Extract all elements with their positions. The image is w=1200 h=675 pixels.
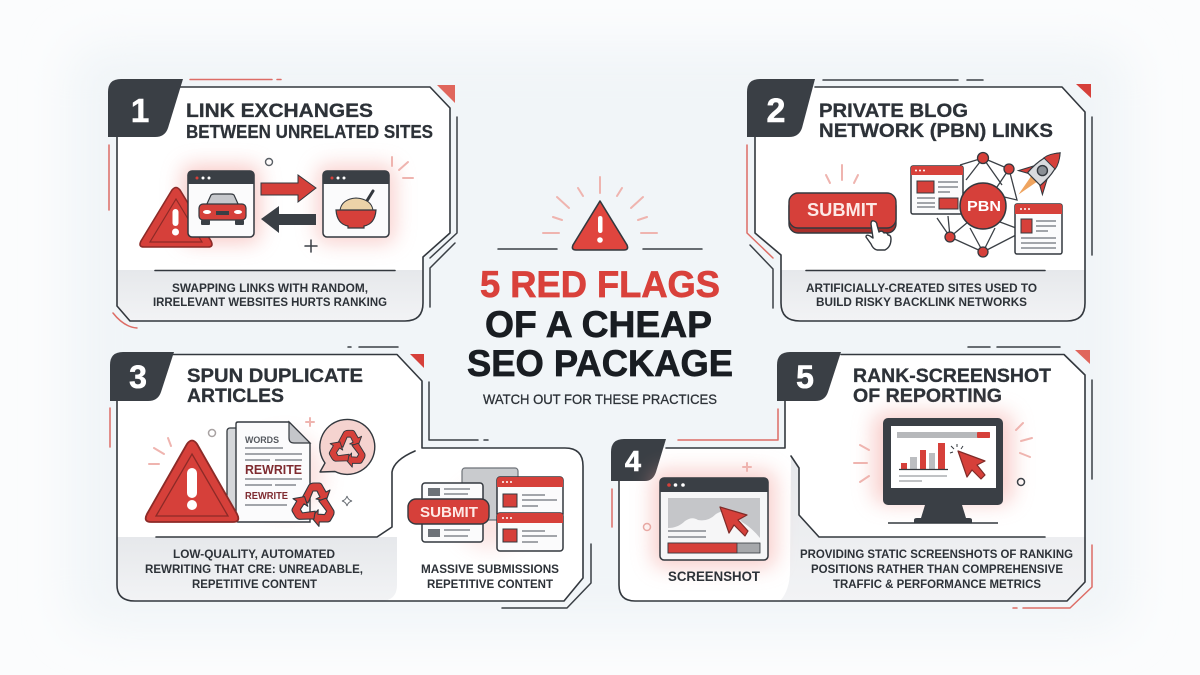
window: left site [911,166,963,214]
arrow: dark left [261,206,316,233]
panel 3 heading [187,366,363,407]
panel 4 number badge: 4 [625,446,641,478]
panel 4 number badge [611,439,666,481]
panel 2 number badge [747,79,815,137]
icon: recycle speech bubble [320,419,375,474]
icon: browser with car [188,171,254,237]
panel 2 description: ARTIFICIALLY-CREATED SITES USED TO [806,282,1037,295]
panel 2 description: BUILD RISKY BACKLINK NETWORKS [816,296,1027,309]
window: right site [1015,204,1062,254]
panel 2 illustration: submit button: SUBMIT [807,200,877,220]
icon: browser with bowl [323,171,389,237]
background [70,45,1130,630]
icon: hand pointer [866,221,891,250]
panel 4 and 5: screenshot and reporting [611,347,1092,608]
panel 5 number badge: 5 [796,359,814,395]
submit button: SUBMIT [420,504,478,521]
panel 3 number badge [110,352,174,401]
panel 3 description: LOW-QUALITY, AUTOMATED [173,548,335,561]
panel 3 description: REPETITIVE CONTENT [192,578,317,591]
panel 2 illustration: submit button [789,165,896,250]
icon: monitor [883,418,1003,523]
panel 5 heading: OF REPORTING [853,386,1002,407]
central title block [467,177,733,407]
icon: rocket [1006,141,1072,207]
panel 1 heading: LINK EXCHANGES [186,101,373,122]
title: 5 RED FLAGS [480,264,720,305]
network nodes [945,152,1014,257]
icon: document: REWRITE [245,462,302,477]
panel 3 illustration: spun document [146,418,375,530]
panel 1 description: IRRELEVANT WEBSITES HURTS RANKING [153,296,387,309]
panel 3 description: REWRITING THAT CRE: UNREADABLE, [145,563,363,576]
sub-panel: massive submissions [408,468,563,591]
panel 3: spun duplicate articles [110,347,591,608]
panel 1: link exchanges [108,79,457,328]
title: SEO PACKAGE [467,343,733,384]
window: right stack [497,477,563,551]
icon: document [227,422,310,522]
panel 1 heading [186,101,433,142]
massive submissions description: REPETITIVE CONTENT [427,578,553,591]
panel 5 description [800,548,1073,591]
icon: recycle symbol [287,483,339,530]
panel 4 label: SCREENSHOT [668,569,761,584]
panel 2 description [806,282,1037,309]
window: left stack [422,483,483,542]
submit button [408,499,489,524]
panel 2 heading: PRIVATE BLOG [819,101,968,122]
icon: document: REWRITE [245,490,288,502]
bar chart [899,443,948,481]
panel 5 description: POSITIONS RATHER THAN COMPREHENSIVE [811,563,1063,576]
panel 3 description [145,548,363,591]
panel 5 description: TRAFFIC & PERFORMANCE METRICS [833,578,1041,591]
icon: cursor [720,507,748,536]
panel 1 description [153,282,387,309]
panel 5 illustration: monitor with chart [854,412,1032,523]
panel 3 heading: SPUN DUPLICATE [187,366,363,387]
panel 2 illustration: PBN network [911,141,1072,257]
panel 1 number badge: 1 [131,92,149,129]
arrow: red right [261,175,316,202]
panel 2 heading: NETWORK (PBN) LINKS [819,121,1053,142]
icon: warning triangle [140,188,212,247]
panel 5 description: PROVIDING STATIC SCREENSHOTS OF RANKING [800,548,1073,561]
massive submissions description [421,563,559,591]
icon: document: WORDS [245,435,279,446]
icon: cursor [958,451,985,479]
massive submissions description: MASSIVE SUBMISSIONS [421,563,559,576]
PBN hub: PBN [967,198,1001,215]
panel 5 number badge [777,352,841,401]
PBN hub [960,183,1006,229]
title [467,264,733,384]
panel 2 number badge: 2 [767,92,785,130]
panel 5 heading: RANK-SCREENSHOT [853,366,1051,387]
panel 1 heading: BETWEEN UNRELATED SITES [186,122,433,142]
panel 1 description: SWAPPING LINKS WITH RANDOM, [172,282,368,295]
icon: central warning triangle with rays [498,177,702,250]
panel 2: private blog network [747,79,1092,321]
icon: large warning triangle [146,440,238,522]
panel 3 number badge: 3 [129,359,147,395]
panel 2 heading [819,101,1053,142]
panel 5 heading [853,366,1051,407]
title: OF A CHEAP [485,304,712,345]
panel 1 illustration: link swap [140,157,413,252]
panel 4 illustration: screenshot window [644,463,776,568]
panel 1 number badge [108,79,183,137]
panel 3 heading: ARTICLES [187,386,284,407]
subtitle: WATCH OUT FOR THESE PRACTICES [483,391,717,407]
